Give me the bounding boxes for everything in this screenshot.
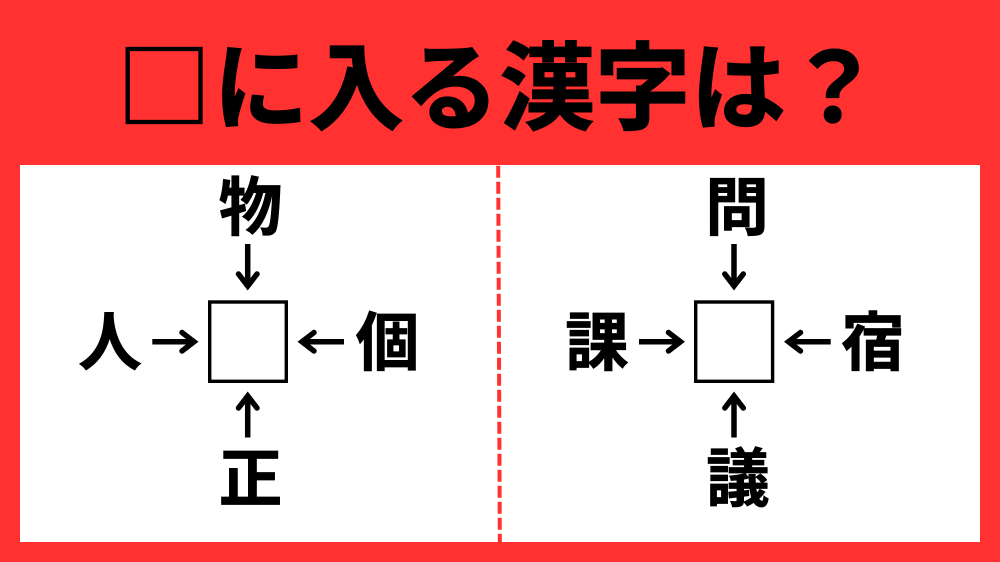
arrows (639, 244, 831, 438)
puzzle: left (78, 174, 419, 515)
kanji right: 宿 (841, 309, 905, 379)
answer box (696, 302, 773, 381)
panel: puzzles (20, 165, 980, 542)
divider (498, 166, 500, 542)
answer box (210, 302, 286, 381)
puzzle: right (565, 174, 905, 515)
arrows (152, 244, 344, 438)
kanji top: 問 (705, 174, 769, 244)
kanji bottom: 議 (706, 445, 770, 515)
kanji left: 課 (565, 309, 629, 379)
kanji top: 物 (219, 174, 282, 244)
kanji right: 個 (356, 309, 419, 379)
kanji bottom: 正 (219, 445, 282, 515)
kanji left: 人 (78, 309, 142, 379)
title: に入る漢字は？ (213, 37, 882, 143)
